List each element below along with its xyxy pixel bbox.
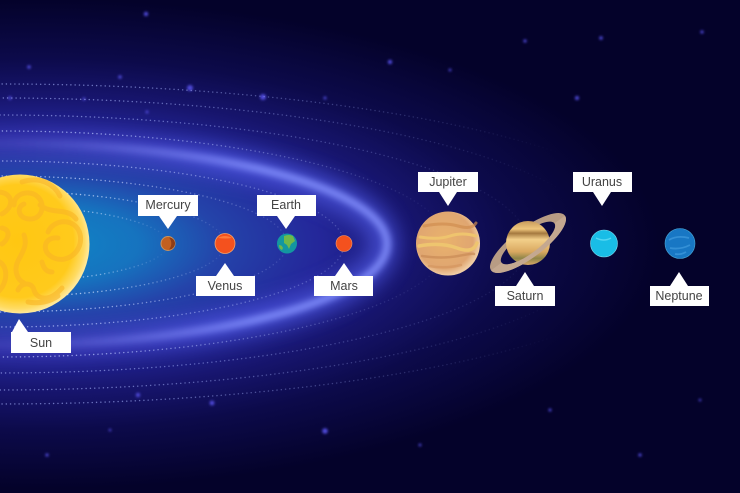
orbits: dotted paths <box>0 84 680 404</box>
label: Mars <box>314 263 373 296</box>
glow ring band around inner planets <box>0 143 387 345</box>
label: Neptune <box>650 272 709 306</box>
label: Earth <box>257 195 316 229</box>
label: Uranus: Uranus <box>582 175 622 189</box>
planet: Venus <box>215 234 235 254</box>
label: Jupiter <box>418 172 478 206</box>
label: Earth: Earth <box>271 198 301 212</box>
label: Saturn: Saturn <box>507 289 543 303</box>
label: Sun <box>11 319 71 353</box>
label: Jupiter: Jupiter <box>429 175 467 189</box>
label: Mars: Mars <box>330 279 358 293</box>
label: Uranus <box>573 172 632 206</box>
planet: Uranus <box>590 230 618 257</box>
planet: Saturn <box>482 204 574 282</box>
planet: Earth <box>277 234 297 254</box>
label: Mercury <box>138 195 198 229</box>
label: Saturn <box>495 272 555 306</box>
planet: Neptune <box>665 228 695 258</box>
planet: Mars <box>336 236 352 252</box>
label: Neptune: Neptune <box>655 289 703 303</box>
label: Sun: Sun <box>30 336 52 350</box>
planet: Jupiter <box>416 212 480 276</box>
label: Venus: Venus <box>208 279 242 293</box>
planet: Mercury <box>161 236 175 250</box>
label: Venus <box>196 263 255 296</box>
planet: Sun <box>0 174 90 314</box>
label: Mercury: Mercury <box>145 198 191 212</box>
